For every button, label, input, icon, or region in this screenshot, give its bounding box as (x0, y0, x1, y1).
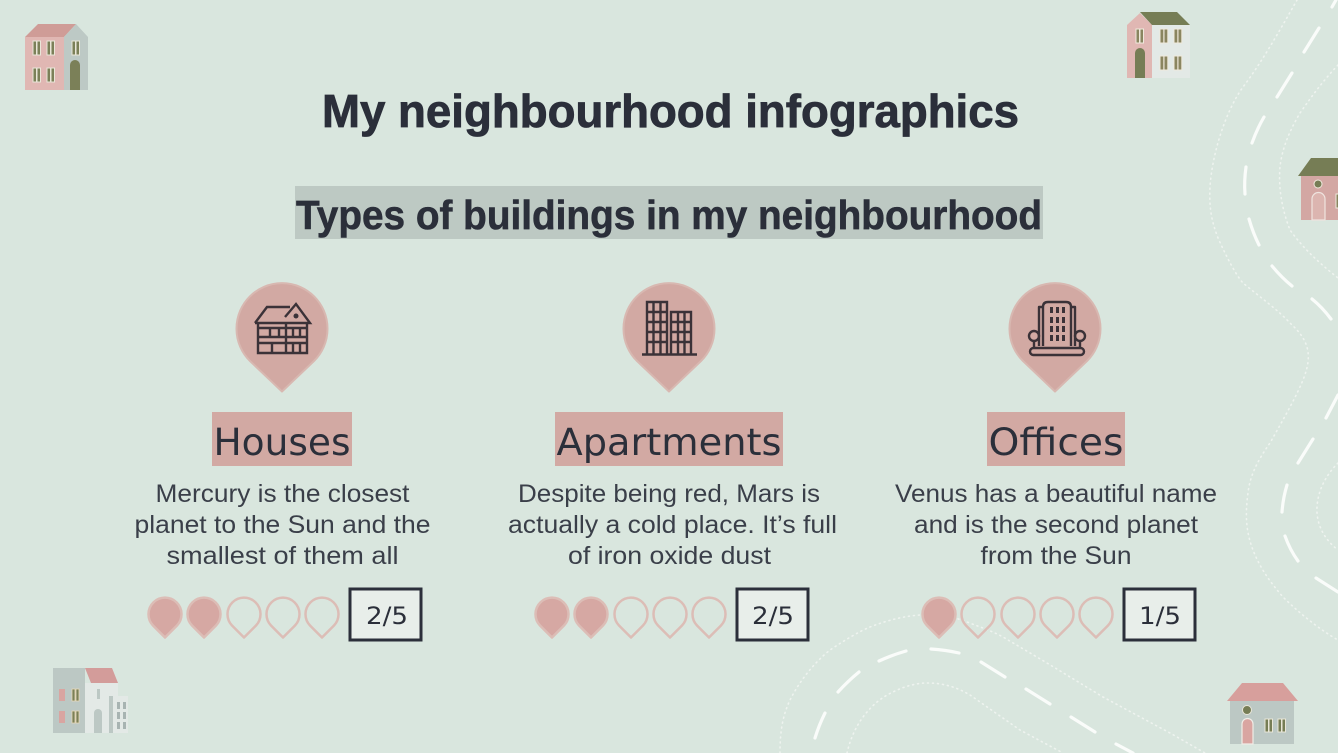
panel: apartments (508, 283, 837, 640)
icon: house top left (25, 24, 88, 90)
road: bottom (780, 615, 1205, 753)
heading: apartments: Apartments (556, 421, 782, 464)
text: apartments description: Despite being red, Mars is (518, 480, 820, 508)
text: apartments description: of iron oxide dust (568, 542, 771, 570)
rating: houses 2 of 5 (148, 589, 421, 640)
subtitle: Types of buildings in my neighbourhood (296, 192, 1042, 238)
heading: houses: Houses (214, 421, 350, 464)
text: offices description: Venus has a beautiful name (895, 480, 1217, 508)
heading: offices: Offices (988, 421, 1124, 464)
icon: house top right (1127, 12, 1190, 78)
rating: apartments 2 of 5: 2/5 (752, 602, 794, 630)
icon: apartments pin (624, 283, 715, 392)
text: apartments description: actually a cold place. It’s full (508, 511, 837, 539)
rating: offices 1 of 5: 1/5 (1139, 602, 1181, 630)
rating: offices 1 of 5 (922, 589, 1195, 640)
panel: houses (134, 283, 430, 640)
panel: offices (895, 283, 1217, 640)
road: right side (1210, 0, 1338, 640)
text: houses description: smallest of them all (166, 542, 398, 570)
text: houses description (134, 480, 430, 570)
icon: house bottom left (53, 668, 128, 733)
title: My neighbourhood infographics (322, 85, 1019, 137)
rating: houses 2 of 5: 2/5 (366, 602, 408, 630)
text: offices description: and is the second planet (914, 511, 1198, 539)
icon: offices pin (1010, 283, 1100, 392)
text: offices description (895, 480, 1217, 570)
icon: house right edge (1298, 158, 1338, 220)
icon: house bottom right (1227, 683, 1298, 744)
text: apartments description (508, 480, 837, 570)
text: houses description: planet to the Sun and the (134, 511, 430, 539)
text: offices description: from the Sun (980, 542, 1132, 570)
text: houses description: Mercury is the closest (156, 480, 410, 508)
rating: apartments 2 of 5 (536, 589, 808, 640)
icon: houses pin (237, 283, 328, 392)
